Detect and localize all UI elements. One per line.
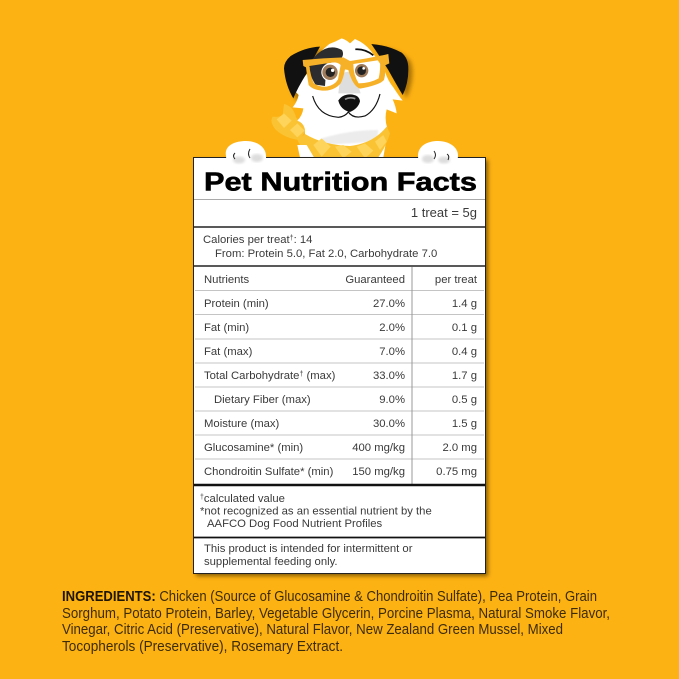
ingredients text: Sorghum, Potato Protein, Barley, Vegetable Glycerin, Porcine Plasma, Natural Smoke Flavor, (62, 606, 610, 622)
feeding statement: supplemental feeding only. (204, 556, 338, 568)
nutrient table: 30.0% (373, 418, 405, 430)
right paw (418, 141, 458, 165)
calories (203, 234, 437, 260)
right eye (354, 62, 371, 79)
nutrient table: 33.0% (373, 370, 405, 382)
nutrient table: 0.5 g (452, 394, 477, 406)
nutrient table: Guaranteed (345, 274, 405, 286)
heading: Pet Nutrition Facts (204, 166, 477, 196)
footnotes: *not recognized as an essential nutrient by the (200, 506, 432, 518)
nutrient table: Fat (max) (204, 346, 253, 358)
brow (355, 49, 373, 55)
left eye (321, 63, 340, 82)
calories: : 14 (294, 234, 312, 246)
nutrient table: 400 mg/kg (352, 442, 405, 454)
nutrient table: 1.7 g (452, 370, 477, 382)
serving size: 1 treat = 5g (411, 205, 477, 220)
nutrient table: 27.0% (373, 298, 405, 310)
feeding statement (204, 543, 413, 568)
nutrient table: 1.4 g (452, 298, 477, 310)
ingredients text (62, 589, 610, 655)
panel: nutrition facts label (194, 158, 486, 574)
nutrient table: 0.75 mg (436, 466, 477, 478)
footnotes (200, 493, 432, 530)
eye patch (309, 47, 343, 86)
nutrient table: Glucosamine* (min) (204, 442, 303, 454)
nutrient table: 0.4 g (452, 346, 477, 358)
nutrient table: 0.1 g (452, 322, 477, 334)
nutrient table: 9.0% (379, 394, 405, 406)
nutrient table: Protein (min) (204, 298, 269, 310)
nutrient table: 2.0% (379, 322, 405, 334)
ingredients text: Tocopherols (Preservative), Rosemary Extract. (62, 639, 343, 655)
footnotes: calculated value (204, 493, 285, 505)
nutrient table: Moisture (max) (204, 418, 280, 430)
nutrient table (195, 267, 484, 484)
nutrient table: (max) (303, 370, 336, 382)
nutrient table: Nutrients (204, 274, 250, 286)
calories: † (290, 235, 294, 242)
left ear (284, 47, 320, 98)
left paw (226, 141, 266, 165)
nutrient table: 7.0% (379, 346, 405, 358)
nutrient table: Total Carbohydrate (204, 370, 299, 382)
nose (338, 94, 360, 112)
ingredients text: INGREDIENTS: Chicken (Source of Glucosamine & Chondroitin Sulfate), Pea Protein, Grain (62, 589, 597, 605)
nutrient table: † (299, 371, 303, 378)
nutrient table: 2.0 mg (442, 442, 477, 454)
feeding statement: This product is intended for intermittent or (204, 543, 413, 555)
calories: Calories per treat (203, 234, 290, 246)
nutrient table: Chondroitin Sulfate* (min) (204, 466, 334, 478)
muzzle shade (338, 72, 361, 93)
illustration: dog mascot with glasses (271, 38, 412, 158)
ingredients text: Vinegar, Citric Acid (Preservative), Natural Flavor, New Zealand Green Mussel, Mixed (62, 622, 563, 638)
right ear (371, 44, 408, 95)
nutrient table: Dietary Fiber (max) (214, 394, 311, 406)
nutrient table: 150 mg/kg (352, 466, 405, 478)
scarf (297, 127, 390, 157)
scarf tail (271, 104, 307, 140)
dog head and body (293, 38, 403, 157)
nutrient table: Fat (min) (204, 322, 249, 334)
smile (313, 94, 380, 117)
footnotes: † (200, 494, 204, 501)
glasses (303, 54, 389, 91)
footnotes: AAFCO Dog Food Nutrient Profiles (207, 518, 383, 530)
panel shadow (196, 160, 488, 576)
nutrient table: per treat (435, 274, 478, 286)
nutrient table: 1.5 g (452, 418, 477, 430)
calories: From: Protein 5.0, Fat 2.0, Carbohydrate 7.0 (215, 248, 437, 260)
